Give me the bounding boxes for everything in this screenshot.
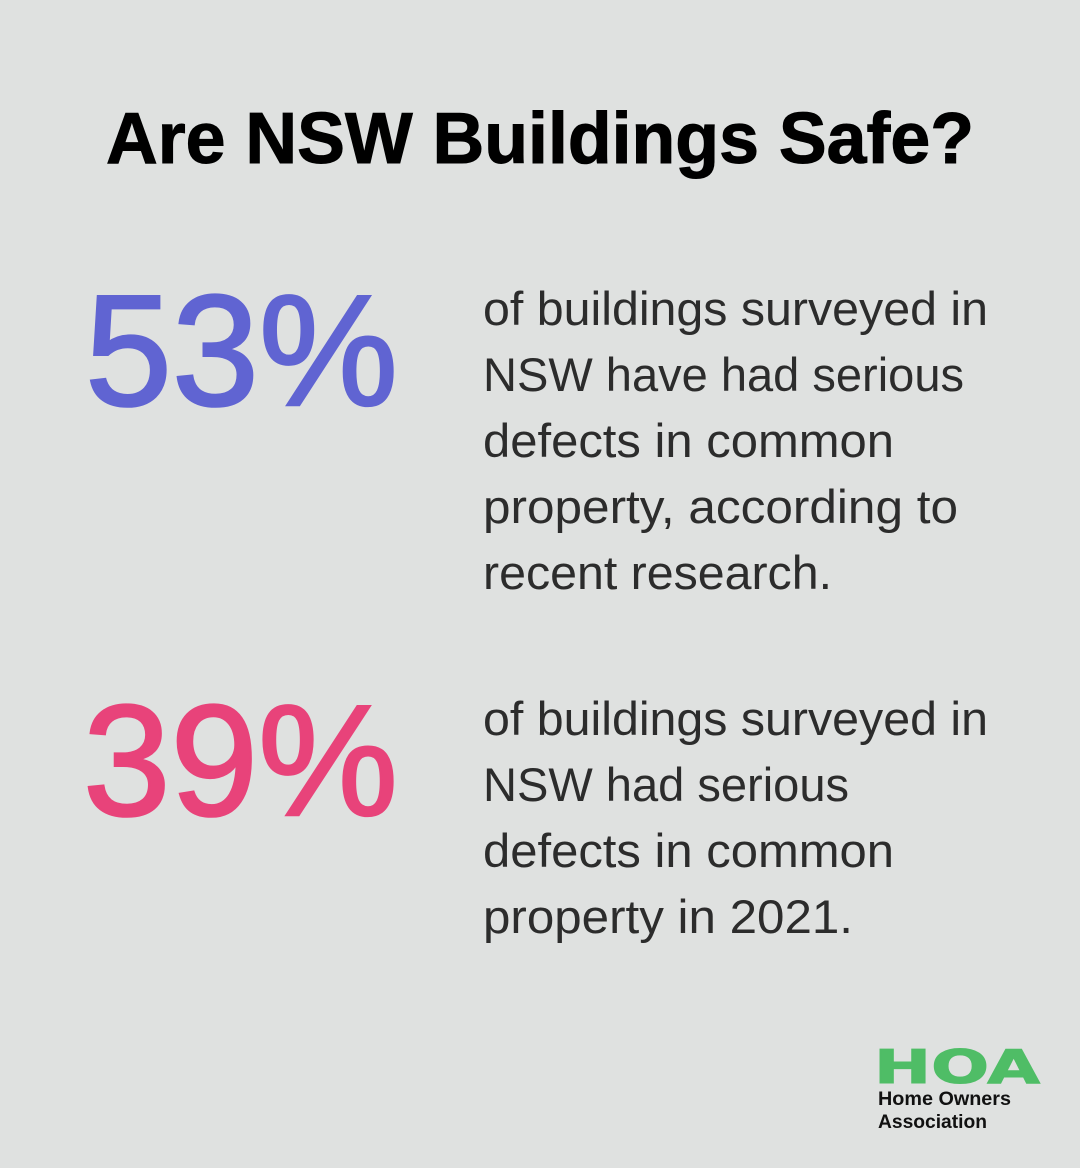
text block: 39% description: of buildings surveyed in	[483, 692, 988, 745]
logo: Home Owners Association	[874, 1040, 1041, 1133]
text block: 53% description: property, according to	[483, 480, 958, 533]
text block: 53% description: recent research.	[483, 546, 832, 599]
stat: 39%: 39%	[83, 673, 398, 849]
logo: Home Owners Association: Home Owners	[878, 1089, 1011, 1110]
stat: 53%: 53%	[85, 263, 398, 439]
logo: Home Owners Association: HOA	[874, 1040, 1041, 1094]
logo: Home Owners Association: Association	[878, 1112, 987, 1133]
text block: 39% description: NSW had serious	[483, 758, 849, 811]
text block: 39% description: property in 2021.	[483, 890, 853, 943]
text block: 53% description	[483, 282, 988, 599]
text block: 53% description: NSW have had serious	[483, 348, 964, 401]
text block: 53% description: of buildings surveyed in	[483, 282, 988, 335]
text block: 39% description	[483, 692, 988, 943]
title: Are NSW Buildings Safe?	[106, 99, 974, 179]
text block: 39% description: defects in common	[483, 824, 894, 877]
text block: 53% description: defects in common	[483, 414, 894, 467]
